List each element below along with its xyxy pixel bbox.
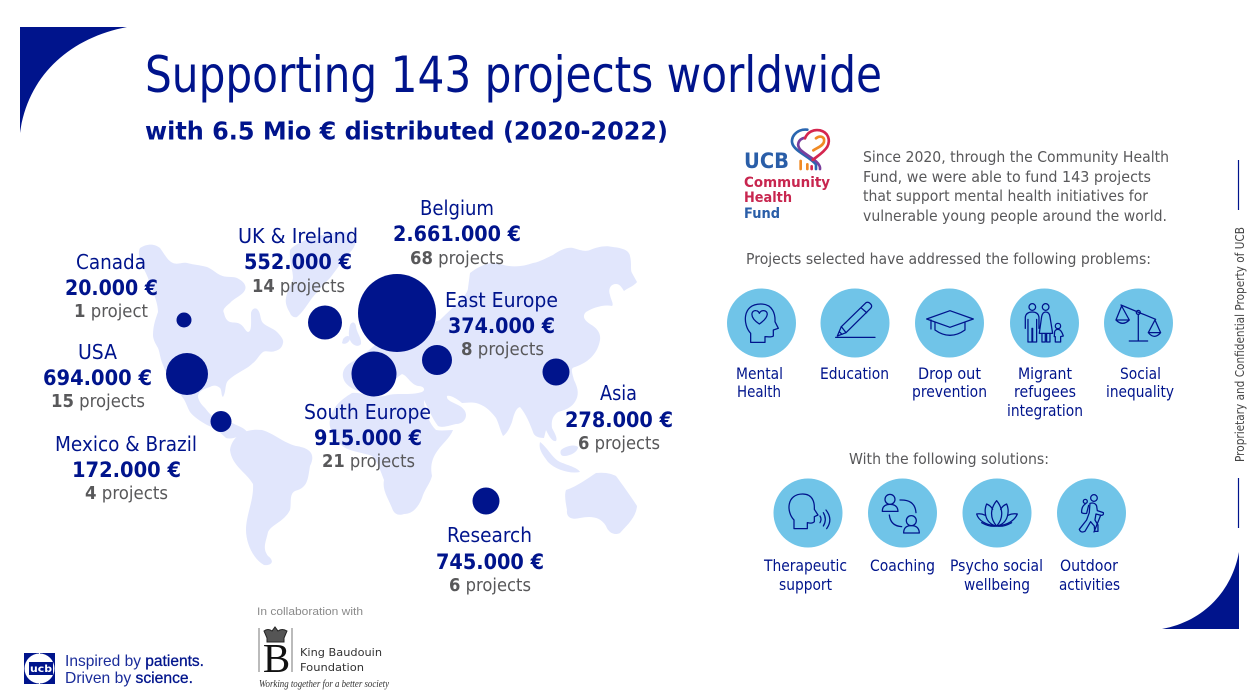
label: Asia: 6 projects [578,433,660,454]
problem: Drop out prevention: prevention [912,382,987,401]
solution: Coaching: Coaching [870,556,935,575]
icon: lotus flower [977,501,1017,526]
label: Belgium: 2.661.000 € [393,222,521,246]
label: Canada: 1 project [74,301,148,322]
label: Research: 6 projects [449,575,531,596]
label: South Europe: 21 projects [322,451,415,472]
label: UK and Ireland: 552.000 € [244,250,352,274]
intro paragraph: Fund, we were able to fund 143 projects [863,168,1151,186]
logo: King Baudouin Foundation [257,606,389,690]
corner decoration: top left [20,27,127,133]
label: USA: 15 projects [51,391,145,412]
logo: UCB tagline: ucb [30,664,52,675]
label: Mexico and Brazil: Mexico & Brazil [55,432,197,456]
label: Belgium: Belgium [420,196,494,220]
solution: Therapeutic support: support [779,575,832,594]
solution: Psycho social wellbeing [950,478,1043,594]
label: South Europe: 915.000 € [314,426,422,450]
logo: UCB Community Health Fund: Fund [744,206,780,222]
label: Asia: 278.000 € [565,408,673,432]
logo: UCB Community Health Fund: Community [744,175,830,191]
problem: Migrant refugees integration: Migrant [1018,364,1072,383]
logo: King Baudouin Foundation: B [263,635,290,681]
label: UK and Ireland: UK & Ireland [238,224,358,248]
label: East Europe: East Europe [445,288,558,312]
label: Canada [65,250,158,322]
problem: Education: Education [820,364,889,383]
label: Research: 745.000 € [436,550,544,574]
solution: Outdoor activities: activities [1059,575,1120,594]
icon: hiker [1079,495,1103,532]
label: East Europe: 8 projects [461,339,544,360]
intro paragraph: that support mental health initiatives for [863,187,1149,205]
heading: solutions: With the following solutions: [849,450,1049,468]
problem: Drop out prevention: Drop out [918,364,981,383]
label: Canada: Canada [76,250,146,274]
problem: Social inequality: inequality [1106,382,1174,401]
logo: King Baudouin Foundation: King Baudouin [300,646,382,659]
label: Canada: 20.000 € [65,276,158,300]
intro paragraph: Since 2020, through the Community Health [863,148,1169,166]
icon: scales [1116,305,1161,341]
problem: Drop out prevention [912,288,987,401]
heading: problems: Projects selected have addressed the following problems: [746,250,1151,268]
logo: King Baudouin Foundation: In collaboration with [257,606,363,618]
bubbles: funding per region [166,274,570,514]
icon: speaking head [789,494,830,529]
title: Supporting 143 projects worldwide [145,46,882,104]
icon: graduation cap [927,311,973,335]
label: Research [436,523,544,596]
solution: Psycho social wellbeing: wellbeing [964,575,1030,594]
intro paragraph: vulnerable young people around the world. [863,207,1167,225]
label: Belgium: 68 projects [410,248,504,269]
label: Mexico and Brazil: 172.000 € [72,458,181,482]
subtitle: with 6.5 Mio € distributed (2020-2022) [145,116,668,146]
label: UK and Ireland [238,224,358,297]
logo: King Baudouin Foundation: Foundation [300,661,364,674]
problem: Migrant refugees integration [1007,288,1083,420]
label: South Europe [304,400,431,472]
label: USA [43,340,152,412]
problem: Mental Health: Mental [736,364,783,383]
label: East Europe [445,288,558,360]
label: Asia [565,381,673,454]
solution: Outdoor activities [1057,478,1126,594]
label: South Europe: South Europe [304,400,431,424]
side note: confidentiality: Proprietary and Confidential Property of UCB [1233,227,1247,462]
problem: Mental Health: Health [737,382,781,401]
solution: Coaching [868,478,937,575]
problem: Migrant refugees integration: refugees [1014,382,1076,401]
label: Mexico and Brazil: 4 projects [85,483,168,504]
problem: Migrant refugees integration: integration [1007,401,1083,420]
logo: King Baudouin Foundation: Working together for a better society [259,679,389,690]
icon: pencil [836,302,875,337]
icon: family [1025,304,1063,342]
icon: two people exchanging [882,494,919,533]
problem: Education [820,288,890,383]
logo: UCB tagline [24,653,204,687]
solution: Outdoor activities: Outdoor [1060,556,1118,575]
logo: UCB tagline: Inspired by patients. [65,653,204,670]
solution: Psycho social wellbeing: Psycho social [950,556,1043,575]
logo: UCB Community Health Fund: Health [744,190,792,206]
solution: Therapeutic support [763,478,847,594]
label: Research: Research [447,523,532,547]
label: East Europe: 374.000 € [448,314,555,338]
problem: Social inequality: Social [1120,364,1161,383]
label: Asia: Asia [600,381,637,405]
label: UK and Ireland: 14 projects [252,276,345,297]
intro paragraph [863,148,1169,225]
solution: Therapeutic support: Therapeutic [763,556,847,575]
problem: Social inequality [1104,288,1174,401]
icon: head with heart [745,304,778,342]
logo: UCB Community Health Fund [744,130,830,222]
label: USA: USA [78,340,117,364]
label: USA: 694.000 € [43,366,152,390]
logo: UCB tagline: Driven by science. [65,670,193,687]
problem: Mental Health [727,288,796,401]
label: Belgium [393,196,521,269]
icon: crown [264,627,287,642]
world map [139,232,637,565]
corner decoration: bottom right [1162,552,1239,629]
logo: UCB Community Health Fund: UCB [744,149,789,173]
label: Mexico and Brazil [55,432,197,504]
